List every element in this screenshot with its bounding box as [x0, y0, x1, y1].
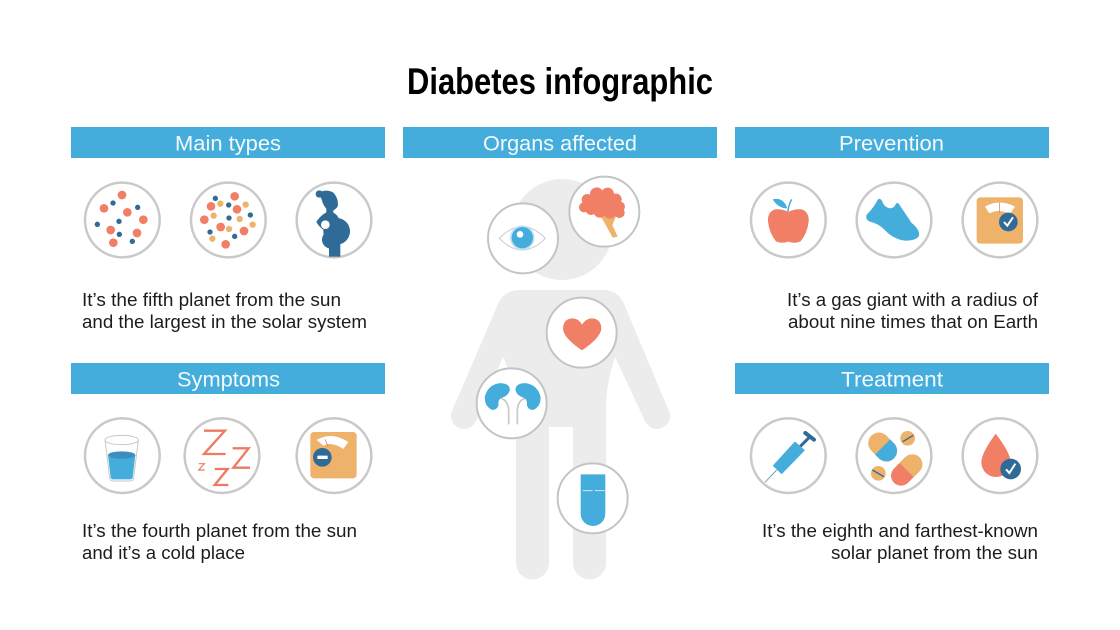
- icon: type 2 dots: [191, 183, 266, 257]
- icon row: symptoms: [85, 418, 371, 493]
- heading: main types: [71, 127, 385, 158]
- body silhouette: [451, 179, 670, 580]
- heading: symptoms: [71, 363, 385, 394]
- text: treatment: It’s the eighth and farthest-known: [762, 521, 1038, 541]
- icon: heart: [547, 298, 617, 368]
- panel: organs affected: [403, 127, 717, 580]
- text: prevention: It’s a gas giant with a radius of: [787, 290, 1039, 310]
- icon: pills: [857, 418, 931, 493]
- heading: organs affected: [403, 127, 717, 158]
- organ icons: [488, 177, 639, 368]
- icon row: treatment: [751, 418, 1037, 493]
- text: prevention: [787, 290, 1039, 332]
- icon row: main types: [85, 183, 371, 257]
- heading: prevention: [735, 127, 1049, 158]
- title: Diabetes infographic: [407, 61, 713, 102]
- icon: glass of water: [85, 418, 160, 493]
- icon: running shoe: [857, 183, 931, 257]
- heading: prevention: Prevention: [839, 132, 944, 156]
- text: symptoms: and it’s a cold place: [82, 543, 245, 563]
- icon: brain: [569, 177, 639, 247]
- text: treatment: [762, 521, 1038, 563]
- icon: pregnant woman: [297, 183, 371, 257]
- heading: main types: Main types: [175, 132, 281, 156]
- heading: treatment: Treatment: [841, 368, 943, 392]
- panel: main types: [71, 127, 385, 332]
- icon: eye: [488, 203, 558, 273]
- text: prevention: about nine times that on Earth: [788, 312, 1038, 332]
- icon: type 1 dots: [85, 183, 160, 257]
- panel: symptoms: [71, 363, 385, 563]
- icon: scale with check: [963, 183, 1037, 257]
- icon: bladder tube: [558, 463, 628, 533]
- text: symptoms: [82, 521, 357, 563]
- icon: kidneys: [477, 368, 547, 438]
- text: treatment: solar planet from the sun: [831, 543, 1038, 563]
- heading: organs affected: Organs affected: [483, 132, 637, 156]
- icon: blood drop with check: [963, 418, 1037, 493]
- icon: sleep z letters: [185, 418, 259, 493]
- text: main types: [82, 290, 367, 332]
- text: symptoms: It’s the fourth planet from the sun: [82, 521, 357, 541]
- panel: treatment: [735, 363, 1049, 563]
- icon: syringe: [751, 418, 826, 493]
- text: main types: and the largest in the solar system: [82, 312, 367, 332]
- icon: scale with minus: [297, 418, 371, 493]
- text: main types: It’s the fifth planet from the sun: [82, 290, 341, 310]
- heading: treatment: [735, 363, 1049, 394]
- panel: prevention: [735, 127, 1049, 332]
- icon row: prevention: [751, 183, 1037, 257]
- heading: symptoms: Symptoms: [177, 368, 280, 392]
- icon: apple: [751, 183, 826, 257]
